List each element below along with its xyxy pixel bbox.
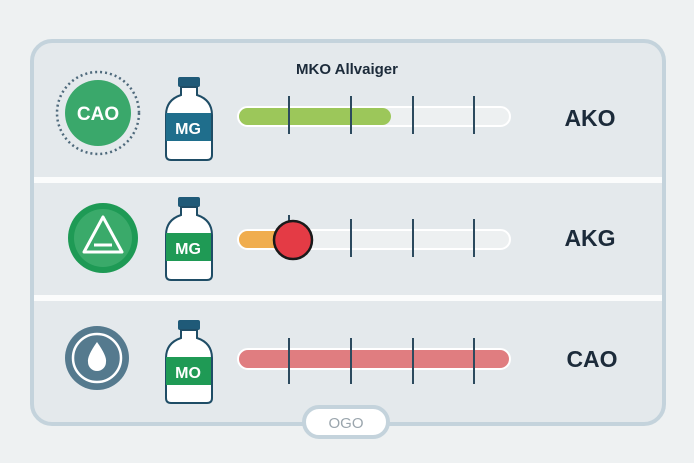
icon: CAO badge: CAO (77, 104, 119, 125)
icon: bottle MG (166, 77, 212, 160)
title: MKO Allvaiger (296, 61, 398, 78)
icon: water drop (65, 326, 129, 390)
icon: warning triangle (68, 203, 138, 273)
icon: bottle MG (166, 197, 212, 280)
bar chart: green level (238, 96, 510, 134)
icon: bottle MG: MG (175, 241, 201, 258)
icon: CAO badge (57, 72, 139, 154)
label AKG: AKG (564, 225, 616, 251)
label AKO: AKO (564, 105, 616, 131)
row 2 (68, 197, 616, 280)
bar chart: red full (238, 338, 510, 384)
icon: bottle MO: MO (175, 365, 201, 382)
row 1 (57, 72, 616, 160)
label CAO: CAO (566, 346, 618, 372)
bar chart: orange level with knob (238, 215, 510, 259)
footer pill OGO (304, 407, 388, 437)
panel frame (32, 41, 664, 424)
row 3 (65, 320, 618, 403)
footer pill OGO: OGO (328, 415, 364, 432)
icon: bottle MO (166, 320, 212, 403)
icon: bottle MG: MG (175, 121, 201, 138)
